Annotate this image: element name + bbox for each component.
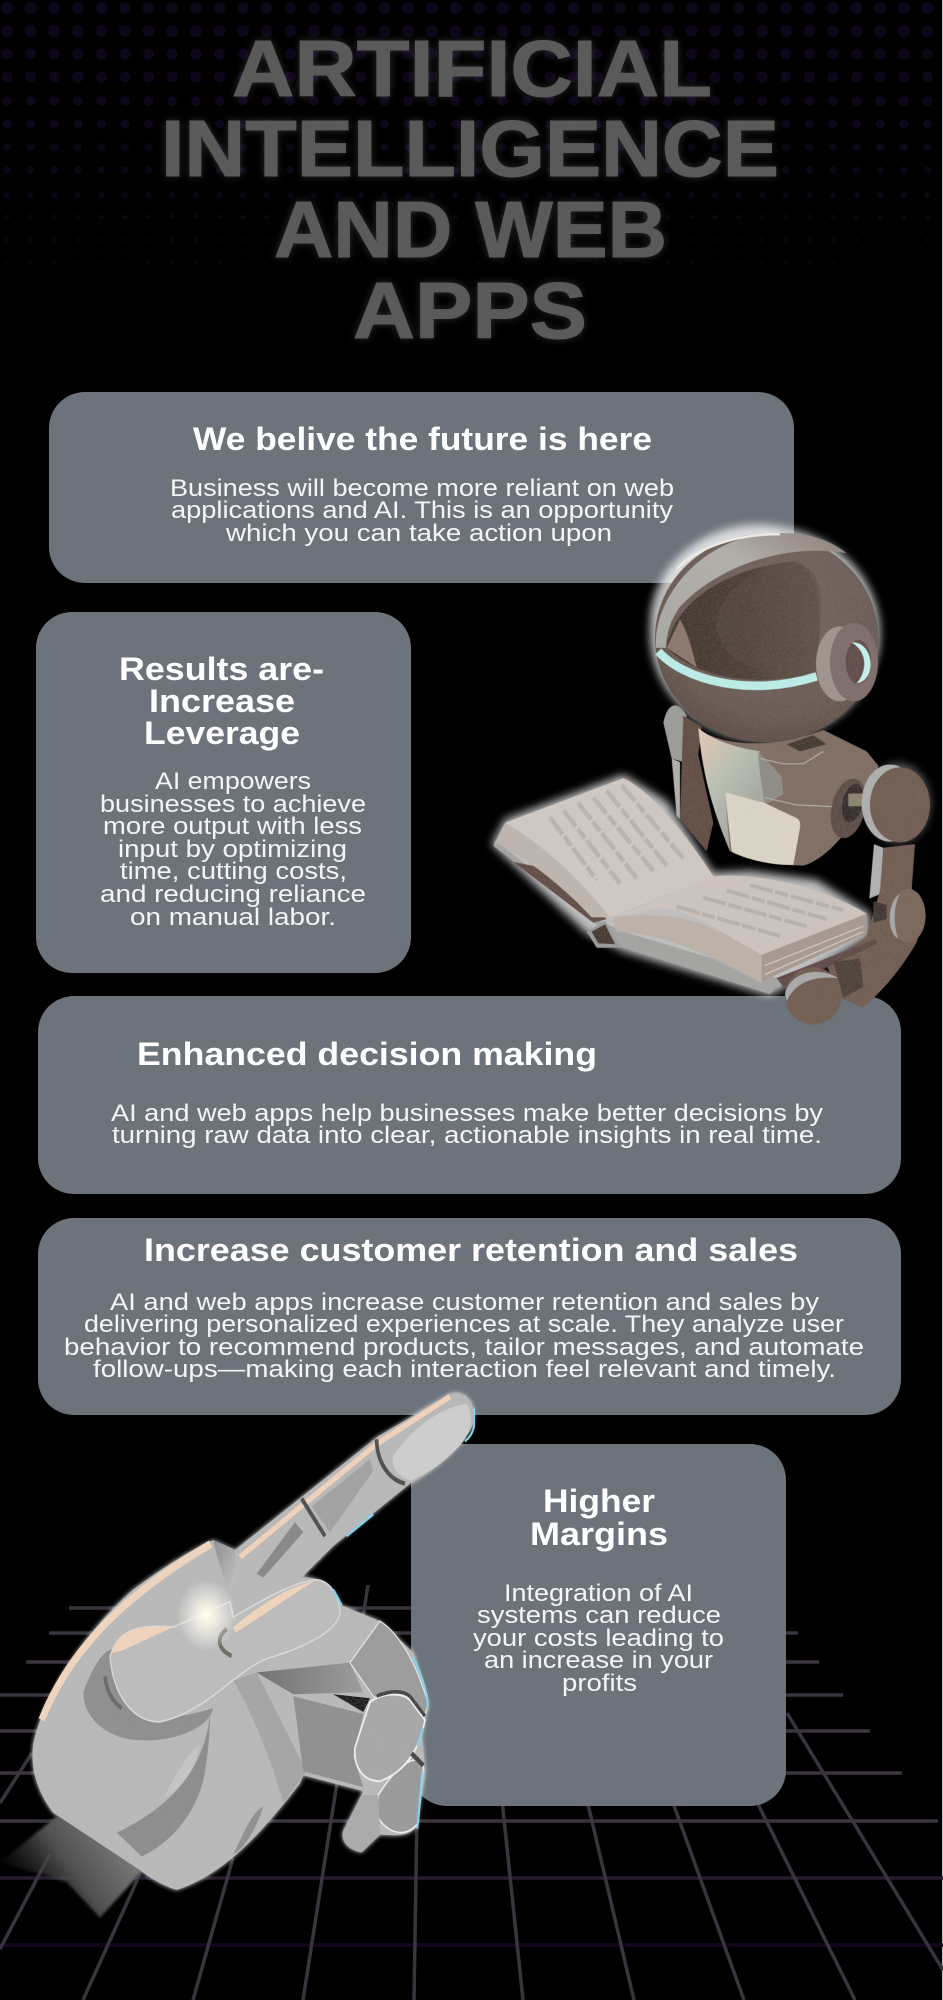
- robot torso: [698, 728, 878, 866]
- text block: margins: profits: [562, 1670, 637, 1697]
- text block: leverage: AI empowers: [155, 768, 311, 795]
- robot right arm: [827, 765, 930, 1008]
- text block: retention: delivering personalized experiences at scale. They analyze user: [84, 1311, 844, 1338]
- illustration: robot reading a book: [492, 525, 930, 1024]
- text block: margins: your costs leading to: [473, 1625, 724, 1652]
- text block: retention: [64, 1289, 864, 1383]
- robot back arm: [663, 705, 713, 851]
- heading: margins: Higher: [543, 1483, 655, 1519]
- heading: margins: [530, 1483, 668, 1552]
- text block: margins: systems can reduce: [477, 1602, 721, 1629]
- heading: retention: Increase customer retention and sales: [144, 1232, 798, 1268]
- text block: retention: behavior to recommend products, tailor messages, and automate: [64, 1334, 864, 1361]
- text block: margins: [473, 1580, 724, 1697]
- panel: enhanced decision making: [38, 996, 901, 1194]
- title: AND WEB: [274, 185, 667, 274]
- text block: future: Business will become more reliant on web: [170, 475, 674, 502]
- panel: customer retention and sales: [38, 1218, 901, 1415]
- text block: retention: AI and web apps increase customer retention and sales by: [110, 1289, 819, 1316]
- illustration: robotic hand pointing: [0, 1393, 475, 1918]
- heading: decision making: Enhanced decision making: [137, 1036, 597, 1072]
- dotted pattern background: [7, 8, 943, 263]
- title: INTELLIGENCE: [161, 104, 779, 193]
- curled fingers: [350, 1621, 428, 1720]
- knuckle and finger base: [213, 1540, 237, 1595]
- text block: future: [170, 475, 674, 547]
- wrist motion trail: [0, 1811, 143, 1918]
- heading: margins: Margins: [530, 1516, 668, 1552]
- joint spark: [177, 1580, 237, 1651]
- panel: higher margins: [411, 1444, 786, 1806]
- text block: decision making: turning raw data into clear, actionable insights in real time.: [112, 1122, 822, 1149]
- text block: future: which you can take action upon: [225, 520, 612, 547]
- text block: margins: Integration of AI: [504, 1580, 693, 1607]
- heading: future: We belive the future is here: [193, 421, 652, 457]
- text block: leverage: more output with less: [103, 813, 362, 840]
- text block: future: applications and AI. This is an opportunity: [171, 497, 673, 524]
- text block: leverage: on manual labor.: [130, 904, 336, 931]
- perspective grid floor: [0, 1585, 943, 2000]
- heading: leverage: Increase: [149, 683, 295, 719]
- tendons: [257, 1663, 363, 1694]
- title: [161, 24, 779, 355]
- thumb and middle finger: [110, 1580, 340, 1722]
- text block: leverage: businesses to achieve: [100, 791, 366, 818]
- text block: decision making: AI and web apps help businesses make better decisions by: [111, 1100, 823, 1127]
- text block: leverage: [100, 768, 366, 931]
- text block: leverage: and reducing reliance: [100, 881, 366, 908]
- open book: [493, 778, 877, 994]
- panel: results increase leverage: [36, 612, 411, 973]
- text block: retention: follow-ups—making each interaction feel relevant and timely.: [93, 1356, 836, 1383]
- text block: decision making: [111, 1100, 823, 1149]
- robot hand: [785, 901, 887, 1024]
- robot head: [655, 533, 878, 742]
- heading: leverage: Leverage: [144, 715, 300, 751]
- heading: leverage: Results are-: [119, 651, 324, 687]
- palm shading: [83, 1649, 213, 1740]
- heading: leverage: [119, 651, 324, 751]
- panel: the future is here: [49, 392, 794, 583]
- text block: leverage: input by optimizing: [118, 836, 347, 863]
- text block: leverage: time, cutting costs,: [120, 858, 347, 885]
- title: APPS: [353, 266, 587, 355]
- text block: margins: an increase in your: [484, 1647, 713, 1674]
- title: ARTIFICIAL: [232, 24, 712, 113]
